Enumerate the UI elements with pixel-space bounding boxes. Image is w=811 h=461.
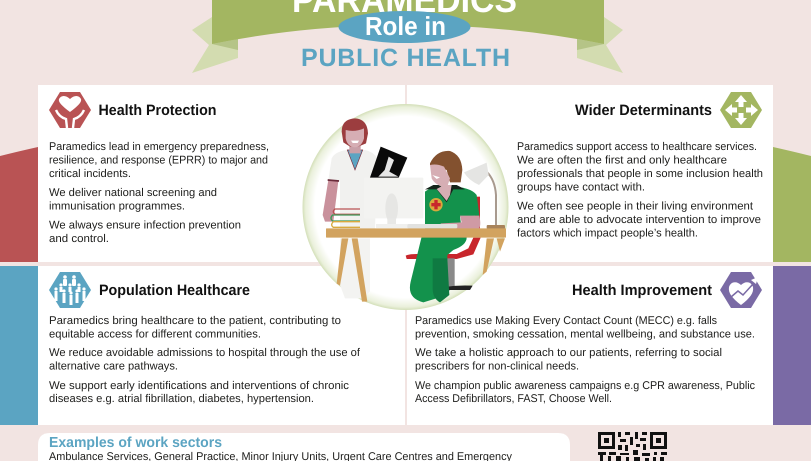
text block: We always ensure infection prevention: [49, 220, 241, 232]
text block: Paramedics support access to healthcare services.: [517, 141, 757, 153]
icon: heart with rising arrow: [720, 272, 762, 308]
text block: We reduce avoidable admissions to hospital through the use of: [49, 347, 361, 359]
computer monitor: [364, 178, 457, 228]
x-ray film: [368, 147, 407, 182]
lamp: [464, 163, 505, 229]
panel: examples of work sectors: [38, 433, 570, 461]
text block: [49, 315, 361, 405]
text block: We are often the first and only healthcare: [517, 154, 727, 166]
panel: population healthcare: [38, 266, 405, 425]
panel: health protection: [38, 85, 405, 262]
text block: [517, 141, 763, 240]
text block: We take a holistic approach to our patients, referring to social: [415, 347, 722, 359]
title: role in oval: Role in: [365, 11, 446, 41]
text block: We often see people in their living environment: [517, 200, 754, 212]
text block: Access Defibrillators, FAST, Choose Well.: [415, 393, 612, 405]
text block: and control.: [49, 233, 109, 245]
text block: We support early identifications and interventions of chronic: [49, 380, 349, 392]
text block: professionals that people in some inclusion health: [517, 168, 763, 180]
icon: group of people: [49, 272, 91, 308]
side band: blue: [0, 266, 38, 425]
side band: green: [773, 147, 811, 262]
icon: four arrows: [720, 92, 762, 128]
text block: Paramedics lead in emergency preparedness,: [49, 141, 269, 153]
text block: prevention, smoking cessation, mental wellbeing, and substance use.: [415, 328, 755, 340]
text block: prescribers for non-clinical needs.: [415, 360, 579, 372]
text block: Paramedics use Making Every Contact Count (MECC) e.g. falls: [415, 315, 717, 327]
chair: [406, 197, 481, 300]
text block: factors which impact people’s health.: [517, 228, 698, 240]
icon: hands holding heart: [49, 92, 91, 128]
title banner: [192, 0, 623, 73]
text block: [415, 315, 755, 405]
text block: We deliver national screening and: [49, 187, 217, 199]
text block: Paramedics bring healthcare to the patient, contributing to: [49, 315, 341, 327]
text block: resilience, and response (EPRR) to major and: [49, 154, 268, 166]
text block: and are able to advocate intervention to improve: [517, 214, 761, 226]
desk: [326, 228, 506, 302]
side band: red: [0, 147, 38, 262]
title: role in oval: [338, 11, 470, 43]
text block: diseases e.g. atrial fibrillation, diabetes, hypertension.: [49, 393, 314, 405]
text block: equitable access for different communities.: [49, 328, 261, 340]
text block: alternative care pathways.: [49, 360, 178, 372]
heading: Wider Determinants: [575, 102, 712, 119]
text block: immunisation programmes.: [49, 200, 185, 212]
panel: wider determinants: [407, 85, 773, 262]
paramedic seated: [410, 151, 480, 302]
heading: Population Healthcare: [99, 282, 250, 299]
text block: We champion public awareness campaigns e.g CPR awareness, Public: [415, 380, 755, 392]
heading: Health Improvement: [572, 282, 712, 299]
central illustration: paramedics at desk: [302, 104, 508, 310]
heading: Health Protection: [98, 102, 216, 119]
title: public health: PUBLIC HEALTH: [301, 44, 510, 72]
side band: purple: [773, 266, 811, 425]
heading: Examples of work sectors: [49, 435, 222, 451]
text block: critical incidents.: [49, 168, 131, 180]
text block: groups have contact with.: [517, 182, 645, 194]
panel: health improvement: [407, 266, 773, 425]
clinician standing: [323, 118, 377, 298]
books: [331, 209, 360, 227]
text block: [49, 141, 269, 245]
QR code: [598, 432, 667, 461]
